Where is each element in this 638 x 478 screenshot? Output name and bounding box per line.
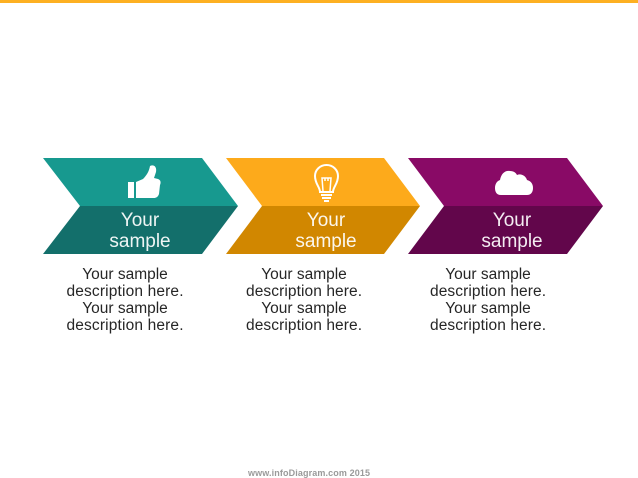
heading: step 1: Your — [121, 210, 160, 231]
chevron: step 2 — [226, 158, 420, 254]
text block: step 1 description: description here. — [66, 317, 184, 334]
heading: step 1: sample — [109, 231, 171, 252]
text block: step 2 description: Your sample — [261, 300, 347, 317]
text block: step 3 description: description here. — [430, 317, 546, 334]
text block: step 2 description: description here. — [246, 283, 362, 300]
text block: step 3 description: Your sample — [445, 266, 531, 283]
text block: step 3 description: description here. — [430, 283, 546, 300]
text block: step 1 description: description here. — [66, 283, 184, 300]
heading: step 2: Your — [307, 210, 346, 231]
icon: thumbs up — [128, 165, 161, 198]
heading: step 3: Your — [493, 210, 532, 231]
chevron: step 3 — [408, 158, 603, 254]
text block: step 1 description: Your sample — [82, 266, 168, 283]
text block: step 1 description: Your sample — [82, 300, 168, 317]
icon: light bulb — [315, 165, 338, 201]
text block: step 3 description: Your sample — [445, 300, 531, 317]
icon: cloud — [495, 171, 533, 195]
text block: step 2 description: Your sample — [261, 266, 347, 283]
heading: step 2: sample — [295, 231, 357, 252]
heading: step 3: sample — [481, 231, 543, 252]
top accent bar — [0, 0, 638, 3]
footer credit: www.infoDiagram.com 2015 — [247, 468, 370, 478]
text block: step 2 description: description here. — [246, 317, 362, 334]
chevron: step 1 — [43, 158, 238, 254]
